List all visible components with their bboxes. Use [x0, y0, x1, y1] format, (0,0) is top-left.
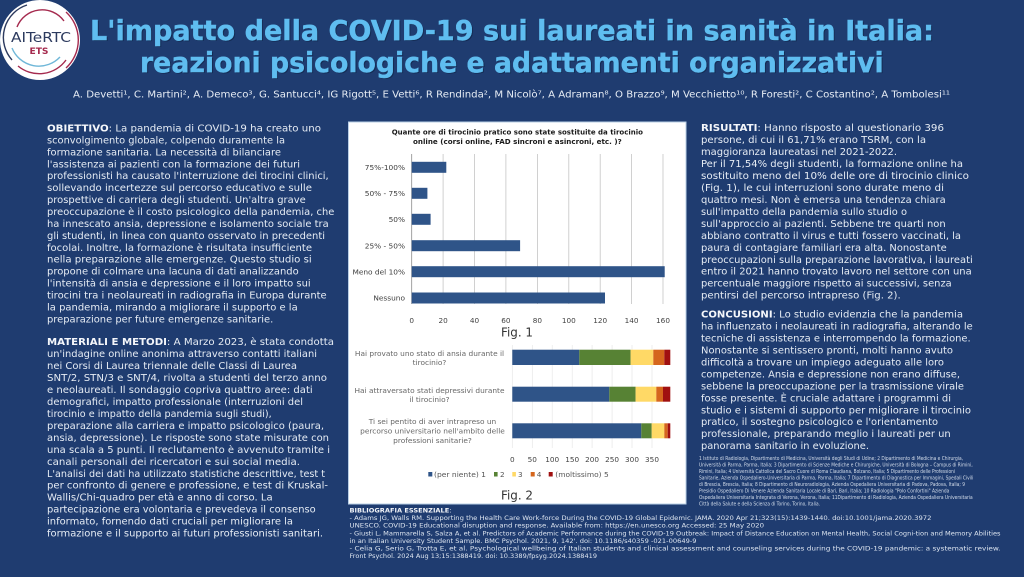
text block: obiettivo	[47, 124, 335, 325]
text block: obiettivo: prospettive di carriera degli studenti. Un'altra grave	[47, 195, 306, 206]
text block: obiettivo: OBIETTIVO : La pandemia di COVID-19 ha creato uno	[47, 124, 321, 134]
text block: conclusioni	[701, 310, 973, 452]
text block: affiliations: Presidio Ospedaliero Di Venere Azienda Sanitaria Locale di Bari, Bari, Italia; 10 Radiologia "Polo Confortini" Azienda	[699, 488, 949, 494]
text block: materiali e metodi: demografici, impatto professionale (interruzioni del	[47, 397, 303, 408]
stacked bar chart: figure 2: 0	[510, 455, 515, 464]
text block: materiali e metodi: una scala a 5 punti. Il reclutamento è avvenuto tramite i	[47, 445, 330, 456]
text block: affiliations: Università di Parma, Parma, Italia; 3 Dipartimento di Scienze Mediche e Chirurgiche, Università di Bologna – Campus di Rimini,	[699, 462, 973, 468]
text block: affiliations: Rimini, Italia; 4 Università Cattolica del Sacro Cuore di Roma Claudiana, Bolzano, Italia; 5 Dipartimento delle Professioni	[699, 468, 955, 475]
text block: bibliografia: - Celia G, Serio G, Trotta E, et al. Psychological wellbeing of Italian students and clinical assessment and counseling services during the COVID-19 pandemic: a systematic review.	[350, 545, 1000, 552]
bar chart: figure 1: 100	[562, 316, 576, 325]
bar chart: figure 1: 75%-100%	[365, 163, 405, 172]
text block: materiali e metodi: nei Corsi di Laurea triennale delle Classi di Laurea	[47, 361, 297, 372]
text block: materiali e metodi: ansia, depressione). Le risposte sono state misurate con	[47, 433, 329, 444]
text block: risultati: pentirsi del percorso intrapreso (Fig. 2).	[701, 291, 901, 302]
text block: affiliations: di Brescia, Brescia, Italia; 8 Dipartimento di Neuroradiologia, Azienda Ospedaliera Universitaria di Padova, Padova, Italia; 9	[699, 482, 965, 488]
bar chart: figure 1: 25% - 50%	[365, 241, 405, 250]
stacked bar chart: figure 2: 300	[625, 455, 639, 464]
bar chart: figure 1: 140	[625, 316, 639, 325]
text block: obiettivo: gli studenti, in linea con quanto osservato in precedenti	[47, 231, 325, 242]
title: L'impatto della COVID-19 sui laureati in sanità in Italia:	[90, 15, 934, 47]
text block: obiettivo: nella preparazione alle emergenze. Questo studio si	[47, 255, 312, 266]
chart title: figure 1: online (corsi online, FAD sincroni e asincroni, etc. )?	[413, 137, 622, 146]
text block: conclusioni: professionale, preparando meglio i laureati per un	[701, 429, 951, 440]
stacked bar chart: figure 2: Ti sei pentito di aver intrapreso un	[368, 417, 497, 426]
text block: obiettivo: professionisti ha causato l'interruzione dei tirocini clinici,	[47, 171, 329, 182]
text block: materiali e metodi: Wallis/Chi-quadro per età e anno di corso. La	[47, 493, 273, 504]
bar chart: figure 1: 120	[593, 316, 608, 325]
text block: bibliografia: UNESCO. COVID-19 Educational disruption and response. Available from: https://en.unesco.org Accessed: 25 May 2020	[350, 523, 764, 530]
text block: materiali e metodi: partecipazione era volontaria e prevedeva il consenso	[47, 505, 316, 516]
stacked bar chart: figure 2: 350	[645, 455, 659, 464]
text block: bibliografia: in an Italian University Student Sample. BMC Psychol. 2021, 9, 142'. doi: 10.1186/s40359 -021-00649-9	[350, 538, 696, 545]
text block: bibliografia: - Adams JG, Walls RM. Supporting the Health Care Work-force During the COVID-19 Global Epidemic. JAMA. 2020 Apr 21;323(15):1439-1440. doi:10.1001/jama.2020.3972	[350, 515, 932, 522]
text block: risultati: percentuale maggiore rispetto ai successivi, senza	[701, 279, 952, 290]
authors: A. Devetti¹, C. Martini², A. Demeco³, G. Santucci⁴, IG Rigott⁵, E Vetti⁶, R Rendinda², M Nicolò⁷, A Adraman⁸, O Brazzo⁹, M Vecchietto¹⁰, R Foresti², C Costantino², A Tombolesi¹¹	[73, 90, 950, 100]
bar: ansia	[512, 350, 670, 365]
title: reazioni psicologiche e adattamenti organizzativi	[140, 47, 884, 79]
text block: risultati: preoccupazioni sulla preparazione lavorativa, i laureati	[701, 255, 973, 266]
icon: AITeRTC ETS logo	[0, 0, 80, 80]
text block: materiali e metodi: informato, fornendo dati cruciali per migliorare la	[47, 517, 293, 528]
text block: obiettivo: preparazione per future emergenze sanitarie.	[47, 314, 273, 325]
text block: risultati	[701, 123, 973, 302]
bar chart: figure 1: 60	[501, 316, 511, 325]
text block: obiettivo: sconvolgimento globale, colpendo duramente la	[47, 135, 285, 146]
text block: risultati: paura di contagiare familiari era alta. Nonostante	[701, 243, 947, 254]
legend: 2	[500, 470, 505, 479]
text block: affiliations: Ospedaliera Universitaria Integrata di Verona, Verona, Italia; 11Dipartimento di Radiologia, Azienda Ospedaliera Universitaria	[699, 495, 973, 501]
legend	[428, 470, 609, 479]
icon: AITeRTC ETS logo: AITeRTC	[11, 31, 71, 46]
bar chart: figure 1: 160	[656, 316, 670, 325]
bar chart: figure 1: 40	[470, 316, 479, 325]
text block: conclusioni: fosse presente. È cruciale adattare i programmi di	[701, 392, 951, 404]
text block: obiettivo: ha innescato ansia, depressione e isolamento sociale tra	[47, 219, 329, 230]
text block: materiali e metodi: preparazione alla carriera e impatto psicologico (paura,	[47, 421, 324, 432]
caption: Fig. 2: Fig. 2	[501, 488, 533, 502]
text block: conclusioni: sebbene la preoccupazione per la trasmissione virale	[701, 381, 964, 392]
text block: obiettivo: l'assistenza ai pazienti con la formazione dei futuri	[47, 159, 300, 170]
title: reazioni psicologiche e adattamenti organizzativi	[141, 48, 885, 80]
text block: conclusioni: tecniche di assistenza e interrompendo la formazione.	[701, 333, 971, 344]
text block: risultati: Per il 71,54% degli studenti, la formazione online ha	[701, 159, 963, 170]
text block: materiali e metodi: MATERIALI E METODI : A Marzo 2023, è stata condotta	[47, 337, 334, 348]
text block: obiettivo: propone di colmare una lacuna di dati analizzando	[47, 267, 299, 278]
stacked bar chart: figure 2: professioni sanitarie?	[393, 436, 472, 445]
text block: conclusioni: pratico, il sostegno psicologico e l'orientamento	[701, 417, 938, 428]
bar chart: figure 1: 50% - 75%	[365, 189, 405, 198]
text block: conclusioni: competenze. Ansia e depressione non erano diffuse,	[701, 369, 960, 380]
stacked bar chart: figure 2: percorso universitario nell'ambito delle	[360, 426, 505, 435]
stacked bar chart: figure 2: 150	[565, 455, 580, 464]
text block: conclusioni: CONCUSIONI : Lo studio evidenzia che la pandemia	[701, 310, 963, 320]
text block: bibliografia: Front Psychol. 2024 Aug 13;15:1388419. doi: 10.3389/fpsyg.2024.1388419	[350, 553, 597, 560]
stacked bar chart: figure 2: 200	[585, 455, 599, 464]
bar: depressione	[512, 387, 670, 402]
legend: (moltissimo) 5	[555, 470, 609, 479]
text block: risultati: entro il 2021 hanno trovato lavoro nel settore con una	[701, 267, 972, 278]
legend: 3	[518, 470, 523, 479]
text block: obiettivo: focolai. Inoltre, la formazione è risultata insufficiente	[47, 243, 312, 254]
text block: bibliografia	[350, 507, 1000, 560]
text block: risultati: sostituito meno del 10% delle ore di tirocinio clinico	[701, 171, 969, 182]
text block: affiliations: Città della Salute e della Scienza di Torino, Torino, Italia.	[699, 500, 820, 507]
stacked bar chart: figure 2: 100	[545, 455, 560, 464]
bar chart: figure 1: 20	[438, 316, 448, 325]
text block: bibliografia: BIBLIOGRAFIA ESSENZIALE :	[350, 507, 452, 514]
text block: conclusioni: difficoltà a trovare un impiego adeguato alle loro	[701, 357, 944, 368]
legend: (per niente) 1	[434, 470, 486, 479]
stacked bar chart: figure 2: Hai provato uno stato di ansia durante il	[355, 349, 504, 358]
chart title: figure 1	[392, 128, 643, 146]
text block: materiali e metodi: un'indagine online anonima attraverso contatti italiani	[47, 349, 317, 360]
text block: conclusioni: panorama sanitario in evoluzione.	[701, 441, 869, 452]
text block: conclusioni: studio e i sistemi di supporto per migliorare il tirocinio	[701, 405, 971, 416]
text block: obiettivo: preoccupazione è il costo psicologico della pandemia, che	[47, 207, 335, 218]
caption: Fig. 1: Fig. 1	[501, 326, 533, 340]
stacked bar chart: figure 2: 250	[605, 455, 619, 464]
text block: materiali e metodi: e neolaureati. Il sondaggio copriva quattro aree: dati	[47, 385, 313, 396]
title: L'impatto della COVID-19 sui laureati in sanità in Italia:	[91, 16, 935, 48]
text block: obiettivo: sollevando incertezze sul percorso educativo e sulle	[47, 183, 312, 194]
bar chart: figure 1: Nessuno	[373, 294, 405, 303]
text block: affiliations: Sanitarie, Azienda Ospedaliero-Universitaria di Parma, Parma, Italia; 7 Dipartimento di Diagnostica per Immagini, Spedali Civili	[699, 475, 973, 481]
text block: materiali e metodi	[47, 337, 334, 540]
stacked bar chart: figure 2: Hai attraversato stati depressivi durante	[354, 386, 505, 395]
text block: risultati: maggioranza laureatasi nel 2021-2022.	[701, 147, 897, 158]
text block: conclusioni: ha influenzato i neolaureati in radiografia, alterando le	[701, 322, 973, 332]
bar chart: figure 1: 0	[409, 316, 414, 325]
stacked bar chart: figure 2	[354, 345, 670, 479]
text block: materiali e metodi: canali personali dei ricercatori e sui social media.	[47, 457, 300, 468]
text block: risultati: persone, di cui il 61,71% erano TSRM, con la	[701, 135, 926, 146]
text block: obiettivo: la pandemia, mirando a migliorare il supporto e la	[47, 302, 298, 314]
bar chart: figure 1: Meno del 10%	[352, 267, 405, 276]
text block: materiali e metodi: formazione e il supporto ai futuri professionisti sanitari.	[47, 529, 323, 540]
bar chart: figure 1	[352, 154, 670, 325]
text block: materiali e metodi: SNT/2, STN/3 e SNT/4, rivolta a studenti del terzo anno	[47, 373, 327, 384]
text block: conclusioni: Nonostante si sentissero pronti, molti hanno avuto	[701, 345, 953, 356]
stacked bar chart: figure 2: 50	[528, 455, 537, 464]
bar: pentimento	[512, 423, 670, 438]
title	[90, 15, 935, 80]
text block: affiliations: 1 Istituto di Radiologia, Dipartimento di Medicina, Università degli Studi di Udine; 2 Dipartimento di Medicina e Chirurgia,	[699, 455, 963, 462]
bar chart: figure 1: 50%	[389, 215, 405, 224]
text block: materiali e metodi: L'analisi dei dati ha utilizzato statistiche descrittive, test t	[47, 469, 325, 480]
text block: risultati: abbiano contratto il virus e tutti fossero vaccinati, la	[701, 231, 961, 242]
icon: AITeRTC ETS logo: ETS	[30, 47, 48, 57]
text block: obiettivo: tirocini tra i neolaureati in radiografia in Europa durante	[47, 290, 327, 302]
panel: charts	[348, 122, 686, 504]
bar chart: figure 1: 80	[533, 316, 542, 325]
text block: materiali e metodi: tirocinio e impatto della pandemia sugli studi),	[47, 409, 272, 420]
text block: risultati: quattro mesi. Non è emersa una tendenza chiara	[701, 195, 946, 206]
text block: risultati: sull'impatto della pandemia sullo studio o	[701, 207, 907, 218]
text block: affiliations	[699, 455, 973, 507]
stacked bar chart: figure 2: tirocinio?	[413, 358, 446, 367]
text block: bibliografia: - Giusti L, Mammarella S, Salza A, et al. Predictors of Academic Performance during the COVID-19 Outbreak: Impact of Distance Education on Mental Health, Social Cogni-tion and Memory Abilities	[350, 530, 1000, 538]
text block: obiettivo: l'intensità di ansia e depressione e il loro impatto sui	[47, 279, 311, 290]
text block: risultati: sull'approccio ai pazienti. Sebbene tre quarti non	[701, 219, 946, 230]
legend: 4	[537, 470, 542, 479]
text block: materiali e metodi: per confronto di genere e professione, e test di Kruskal-	[47, 481, 328, 492]
text block: risultati: RISULTATI : Hanno risposto al questionario 396	[701, 123, 944, 134]
stacked bar chart: figure 2: il tirocinio?	[409, 395, 450, 404]
text block: risultati: (Fig. 1), le cui interruzioni sono durate meno di	[701, 183, 944, 194]
text block: obiettivo: formazione sanitaria. La necessità di bilanciare	[47, 147, 281, 158]
chart title: figure 1: Quante ore di tirocinio pratico sono state sostituite da tirocinio	[392, 128, 643, 137]
